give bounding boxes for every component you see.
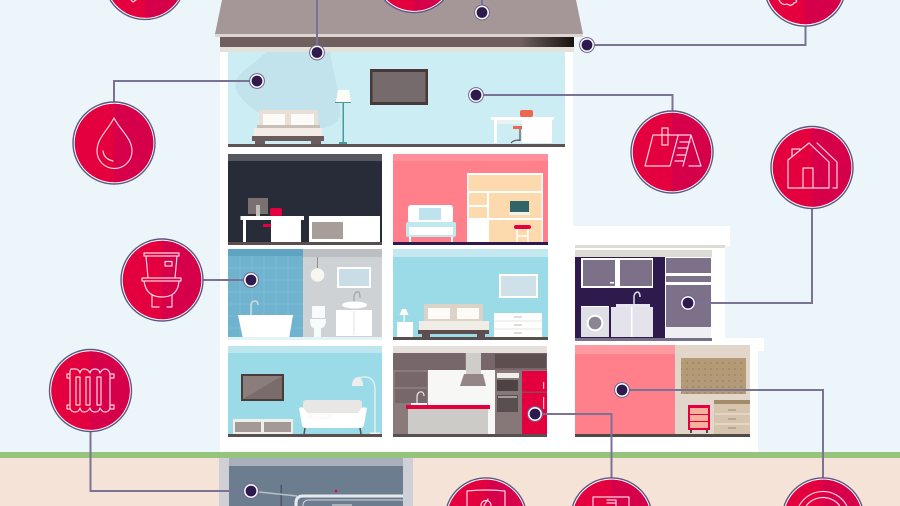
icon circle: radiator [50,350,132,432]
sofa [299,400,367,434]
toilet [310,306,326,339]
roof [215,0,583,52]
nightstand and lamp [397,309,413,337]
washing machine [581,306,609,337]
icon circle: water drop [73,102,155,184]
tool cart [688,405,710,433]
room: pink study bedroom [393,154,548,245]
pendant lamp [311,257,324,282]
ground line [0,452,900,458]
bed [252,110,324,144]
shelves [467,173,543,242]
floor lamp [335,90,351,144]
basement [219,458,413,506]
media cabinet [233,419,293,434]
icon circle: top left [110,0,180,19]
bed [406,205,456,242]
connector lines [90,0,823,491]
room: blue bedroom [393,249,548,340]
soil [0,458,900,506]
icon circle: house [771,126,853,208]
wall cupboards [395,372,427,403]
sink and vanity [336,292,372,336]
fridge [522,371,547,434]
tub [238,301,293,339]
tall cupboards [666,258,711,338]
extension: laundry room [575,245,725,341]
extension: garage [575,345,750,437]
room: living room [228,346,382,437]
bed [418,304,489,338]
desk and chair [491,110,554,143]
icon circle: rings [784,478,862,506]
arc floor lamp [352,377,380,434]
room: dark office [228,154,382,245]
house walls [220,47,764,452]
room: bathroom [228,249,382,340]
tv [370,69,428,105]
icon circle: roof insulation [631,111,713,193]
icon circle: boiler [573,478,650,506]
icon circle: toilet [121,239,203,321]
dresser [494,313,542,337]
cooker hood [460,353,486,386]
sink unit [611,292,653,337]
icon circle: top centre [384,0,444,13]
icon circle: meter [447,478,525,506]
ovens [495,370,522,434]
icon circle: top right [767,0,843,26]
tv [241,374,284,401]
island [406,392,490,434]
wall cabinets [581,258,653,288]
pegboard [681,358,746,394]
mirror [499,274,538,298]
roof leak stain [235,52,340,129]
mirror [337,267,371,288]
connector dots [244,5,695,498]
drawers [714,400,750,434]
room: top floor bedroom [228,52,565,147]
room: kitchen [393,346,547,437]
